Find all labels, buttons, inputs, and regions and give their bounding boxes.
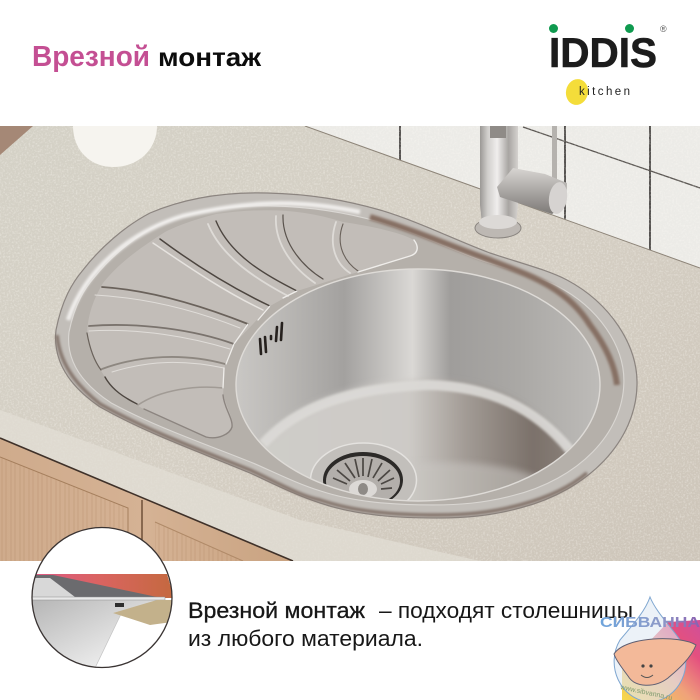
drainboard ribs xyxy=(87,215,417,438)
sink xyxy=(56,193,637,518)
watermark colour block xyxy=(622,620,700,700)
cutting board xyxy=(0,126,33,155)
slot xyxy=(115,603,124,607)
steel edge xyxy=(30,575,157,597)
wood cabinets xyxy=(0,438,293,561)
particle board xyxy=(113,600,175,625)
logo: IDDIS kitchen: kitchen xyxy=(579,86,630,98)
drain strainer xyxy=(310,442,418,500)
tile wall xyxy=(290,126,700,276)
description text: Врезной монтаж xyxy=(188,598,365,623)
rim deck xyxy=(69,206,624,505)
floor front light xyxy=(431,462,535,500)
mug xyxy=(73,126,157,167)
bowl xyxy=(236,270,600,500)
countertop layer xyxy=(32,574,174,598)
heading: Врезной xyxy=(32,41,150,73)
watermark bath character xyxy=(614,639,696,685)
logo: IDDIS kitchen: IDDIS xyxy=(549,29,657,76)
countertop xyxy=(0,126,700,561)
description text: из любого материала. xyxy=(188,626,423,651)
watermark: Sibvanna: СИБВАННА xyxy=(600,614,700,631)
watermark: Sibvanna xyxy=(600,597,700,700)
faucet xyxy=(475,126,569,238)
sink side xyxy=(32,600,156,666)
heading: монтаж xyxy=(158,42,262,72)
drainboard pad xyxy=(87,210,417,438)
rim highlight xyxy=(68,203,360,320)
rim lower shadow xyxy=(57,335,587,515)
overflow slots xyxy=(260,323,282,354)
inset circle: flush mounting cross-section xyxy=(30,528,175,668)
heading xyxy=(32,41,262,73)
description text: – подходят столешницы xyxy=(379,598,633,623)
watermark drop xyxy=(614,597,686,700)
photo: kitchen sink on countertop xyxy=(0,126,700,561)
logo: IDDIS kitchen xyxy=(549,24,667,107)
rim dark band xyxy=(370,217,617,385)
description text xyxy=(188,598,633,651)
sink rim xyxy=(56,193,637,518)
logo: IDDIS kitchen: ® xyxy=(660,24,667,34)
bowl floor xyxy=(264,386,566,494)
